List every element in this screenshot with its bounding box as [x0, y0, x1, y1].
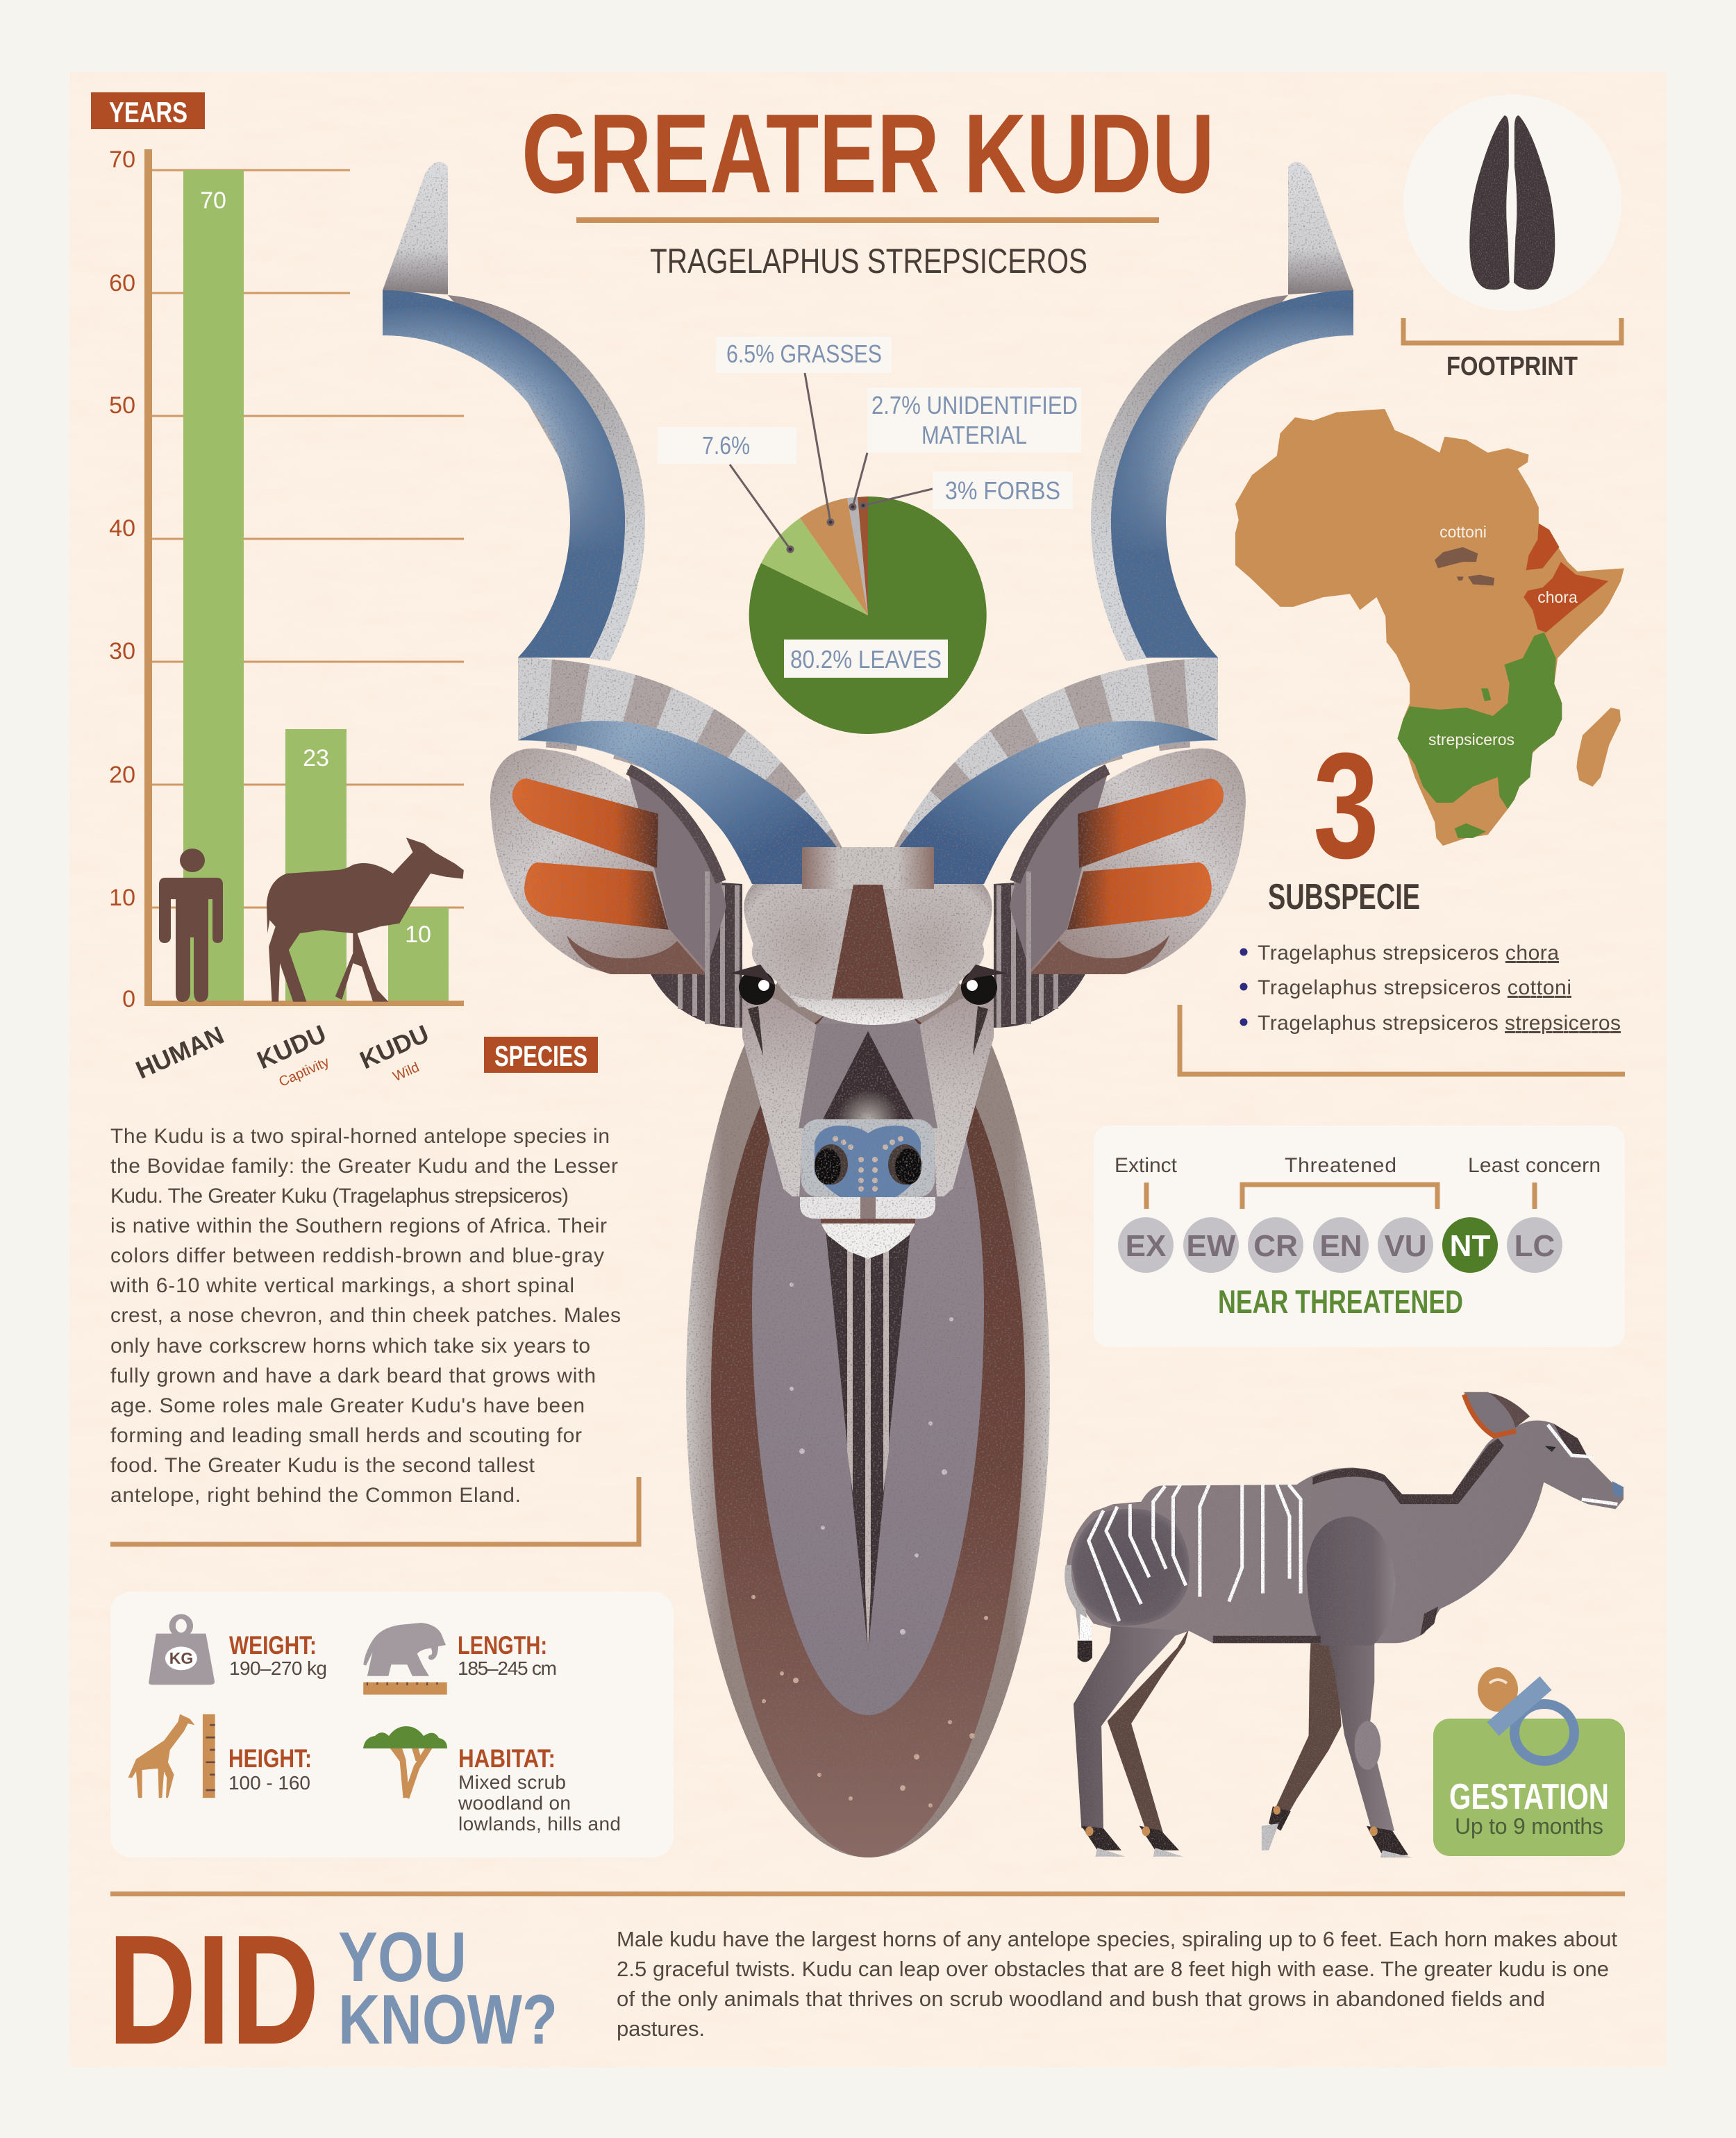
- paragraph: species description: the Bovidae family: the Greater Kudu and the Lesser: [110, 1155, 618, 1178]
- paragraph: species description: colors differ between reddish-brown and blue-gray: [110, 1244, 604, 1267]
- axis labels: 10: [109, 885, 135, 911]
- paragraph: species description: food. The Greater Kudu is the second tallest: [110, 1454, 535, 1477]
- icon: kudu silhouette: [267, 837, 464, 1002]
- map labels: strepsiceros: [1428, 730, 1514, 749]
- icon: hoof print: [1469, 115, 1555, 290]
- subspecies list: Tragelaphus strepsiceros strepsiceros: [1258, 1012, 1621, 1035]
- label: 7.6 percent: [658, 427, 796, 464]
- did you know heading: [108, 1902, 558, 2077]
- label: leaves: 80.2% LEAVES: [790, 645, 942, 674]
- did you know text: pastures.: [617, 2016, 705, 2041]
- white stripes: [1089, 1485, 1301, 1621]
- paragraph: species description: antelope, right behind the Common Eland.: [110, 1484, 521, 1507]
- map labels: cottoni: [1439, 523, 1487, 541]
- title underline: [576, 217, 1159, 223]
- range: chora: [1524, 524, 1608, 633]
- subspecie heading: SUBSPECIE: [1268, 877, 1420, 917]
- paragraph: species description: [110, 1125, 621, 1507]
- icon: weight: [149, 1617, 215, 1685]
- gestation heading: GESTATION: [1449, 1777, 1609, 1817]
- status circles: NT: [1450, 1229, 1490, 1263]
- weight text: 190–270 kg: [229, 1657, 327, 1679]
- label: unidentified: 2.7% UNIDENTIFIED: [871, 391, 1078, 419]
- label: forbs: 3% FORBS: [945, 476, 1060, 505]
- bar: kudu wild 10: 10: [405, 921, 431, 948]
- axis labels: 20: [109, 762, 135, 788]
- habitat text: lowlands, hills and: [458, 1813, 621, 1835]
- status circles: LC: [1514, 1229, 1555, 1263]
- slice: leaves: [749, 496, 987, 734]
- did you know heading: YOU: [338, 1919, 467, 1996]
- paragraph: species description: crest, a nose chevron, and thin cheek patches. Males: [110, 1304, 621, 1327]
- footprint label: FOOTPRINT: [1446, 352, 1578, 381]
- paragraph: species description: is native within the Southern regions of Africa. Their: [110, 1214, 607, 1237]
- icon: acacia tree: [363, 1726, 447, 1798]
- ears: [1484, 1392, 1530, 1433]
- length text: 185–245 cm: [458, 1657, 557, 1679]
- axis labels: 60: [109, 270, 135, 297]
- years tag: YEARS: [109, 96, 187, 128]
- subspecies list: Tragelaphus strepsiceros cottoni: [1258, 976, 1571, 999]
- status labels: Extinct: [1115, 1154, 1178, 1177]
- eyes: [728, 964, 1008, 1005]
- bar: kudu wild 10: [388, 908, 449, 1003]
- label: unidentified: MATERIAL: [921, 421, 1027, 449]
- label: 7.6 percent: 7.6%: [702, 431, 750, 460]
- label: grasses: 6.5% GRASSES: [726, 340, 882, 368]
- panel: quick facts: KG: [169, 1649, 193, 1667]
- did you know text: Male kudu have the largest horns of any antelope species, spiraling up to 6 feet. Each horn makes about: [617, 1927, 1617, 1951]
- icon: pacifier: [1478, 1667, 1574, 1761]
- status circles: VU: [1384, 1229, 1427, 1263]
- label: leaves: [784, 640, 948, 678]
- bar: human 70: 70: [200, 187, 226, 214]
- africa landmass: [1235, 409, 1624, 846]
- species tag: [484, 1037, 598, 1073]
- did you know text: 2.5 graceful twists. Kudu can leap over obstacles that are 8 feet high with ease. The greater kudu is one: [617, 1957, 1609, 1981]
- subspecies count: [1180, 721, 1625, 1074]
- status labels: Threatened: [1285, 1154, 1396, 1177]
- did you know text: of the only animals that thrives on scrub woodland and bush that grows in abandoned fields and: [617, 1987, 1545, 2011]
- footprint circle: [1403, 94, 1621, 311]
- axis labels: 70: [109, 147, 135, 173]
- paragraph: species description: only have corkscrew horns which take six years to: [110, 1335, 590, 1358]
- habitat text: [458, 1744, 621, 1835]
- paragraph: species description: forming and leading small herds and scouting for: [110, 1424, 582, 1447]
- habitat text: woodland on: [458, 1792, 571, 1814]
- subspecies list: Tragelaphus strepsiceros chora: [1258, 942, 1559, 964]
- panel: conservation status: [1094, 1126, 1625, 1347]
- tail: [1065, 1565, 1092, 1641]
- slice: unidentified: [847, 497, 868, 615]
- paragraph: species description: fully grown and have a dark beard that grows with: [110, 1364, 596, 1387]
- range: strepsiceros: [1397, 633, 1562, 838]
- slice: grasses: [800, 498, 868, 615]
- category labels: [131, 1019, 433, 1085]
- far legs: [1108, 1628, 1189, 1833]
- slice: forbs: [858, 496, 868, 615]
- subtitle: TRAGELAPHUS STREPSICEROS: [650, 242, 1087, 281]
- category labels: KUDU: [253, 1019, 331, 1074]
- subspecies list: [1240, 942, 1621, 1035]
- habitat text: HABITAT:: [458, 1744, 556, 1773]
- height text: 100 - 160: [228, 1772, 310, 1794]
- bar: kudu captivity 23: 23: [303, 745, 329, 771]
- label: forbs: [933, 471, 1073, 509]
- did you know heading: KNOW?: [338, 1981, 558, 2059]
- status name: NEAR THREATENED: [1218, 1283, 1463, 1320]
- slice: 7.6 percent: [761, 518, 868, 615]
- axis labels: 30: [109, 638, 135, 665]
- map labels: chora: [1537, 588, 1578, 606]
- title: GREATER KUDU: [521, 91, 1215, 217]
- weight text: [229, 1631, 327, 1679]
- length text: LENGTH:: [458, 1631, 547, 1660]
- panel: quick facts: [110, 1592, 674, 1857]
- bar chart: lifespan in years: Captivity: [276, 1054, 332, 1090]
- status circles: [1118, 1217, 1562, 1273]
- species tag: SPECIES: [494, 1039, 587, 1072]
- axis labels: 0: [122, 986, 135, 1012]
- status labels: Least concern: [1468, 1154, 1601, 1177]
- status circles: EW: [1187, 1229, 1236, 1263]
- icon: giraffe with ruler: [128, 1714, 215, 1798]
- footprint: [1403, 94, 1621, 381]
- habitat text: Mixed scrub: [458, 1771, 566, 1793]
- mane: [686, 920, 1050, 1857]
- label: grasses: [716, 337, 892, 373]
- gestation value: Up to 9 months: [1455, 1814, 1603, 1839]
- near hind leg: [1074, 1626, 1189, 1828]
- thigh and shoulder: [1071, 1509, 1190, 1626]
- bar chart: lifespan in years: Wild: [391, 1060, 422, 1085]
- bar: human 70: [183, 170, 244, 1003]
- status circles: EX: [1126, 1229, 1166, 1263]
- height text: [228, 1744, 312, 1794]
- did you know text: [617, 1927, 1617, 2041]
- map labels: [1428, 523, 1578, 749]
- leader lines: [730, 373, 933, 552]
- status labels: [1115, 1154, 1601, 1177]
- paragraph: species description: age. Some roles male Greater Kudu's have been: [110, 1394, 585, 1417]
- label: unidentified: [867, 387, 1081, 453]
- bar: kudu captivity 23: [285, 729, 347, 1003]
- axis: [144, 149, 464, 1006]
- horns: [383, 162, 1353, 884]
- range: cottoni: [1435, 547, 1494, 585]
- weight text: WEIGHT:: [229, 1631, 317, 1660]
- axis labels: [109, 147, 135, 1012]
- neck mane: [1312, 1438, 1504, 1504]
- bar chart: lifespan in years: [91, 92, 598, 1090]
- paragraph: species description: with 6-10 white vertical markings, a short spinal: [110, 1274, 574, 1297]
- paragraph: species description: Kudu. The Greater Kuku (Tragelaphus strepsiceros): [110, 1185, 569, 1208]
- madagascar: [1576, 708, 1621, 787]
- icon: human: [159, 849, 223, 1002]
- ears: [490, 749, 1246, 1196]
- axis labels: 40: [109, 515, 135, 542]
- did you know heading: DID: [108, 1902, 319, 2077]
- face: [776, 847, 960, 1259]
- map of Africa with subspecies ranges: [1235, 409, 1624, 846]
- axis labels: 50: [109, 392, 135, 419]
- panel: gestation: [1433, 1667, 1625, 1856]
- length text: [458, 1631, 557, 1679]
- face marks: [1554, 1423, 1587, 1457]
- category labels: KUDU: [356, 1019, 433, 1074]
- big number 3: 3: [1313, 721, 1379, 890]
- status circles: CR: [1253, 1229, 1298, 1263]
- body: [1065, 1421, 1624, 1643]
- status circles: EN: [1319, 1229, 1362, 1263]
- category labels: HUMAN: [131, 1021, 228, 1085]
- height text: HEIGHT:: [228, 1744, 312, 1773]
- illustration: kudu head with horns: [383, 162, 1353, 1857]
- paragraph: species description: The Kudu is a two spiral-horned antelope species in: [110, 1125, 610, 1148]
- pie chart: diet: [658, 337, 1081, 734]
- near front leg: [1326, 1638, 1394, 1833]
- illustration: standing kudu: [1065, 1392, 1624, 1857]
- icon: elephant on ruler: [363, 1623, 447, 1695]
- hooves: [1081, 1826, 1408, 1855]
